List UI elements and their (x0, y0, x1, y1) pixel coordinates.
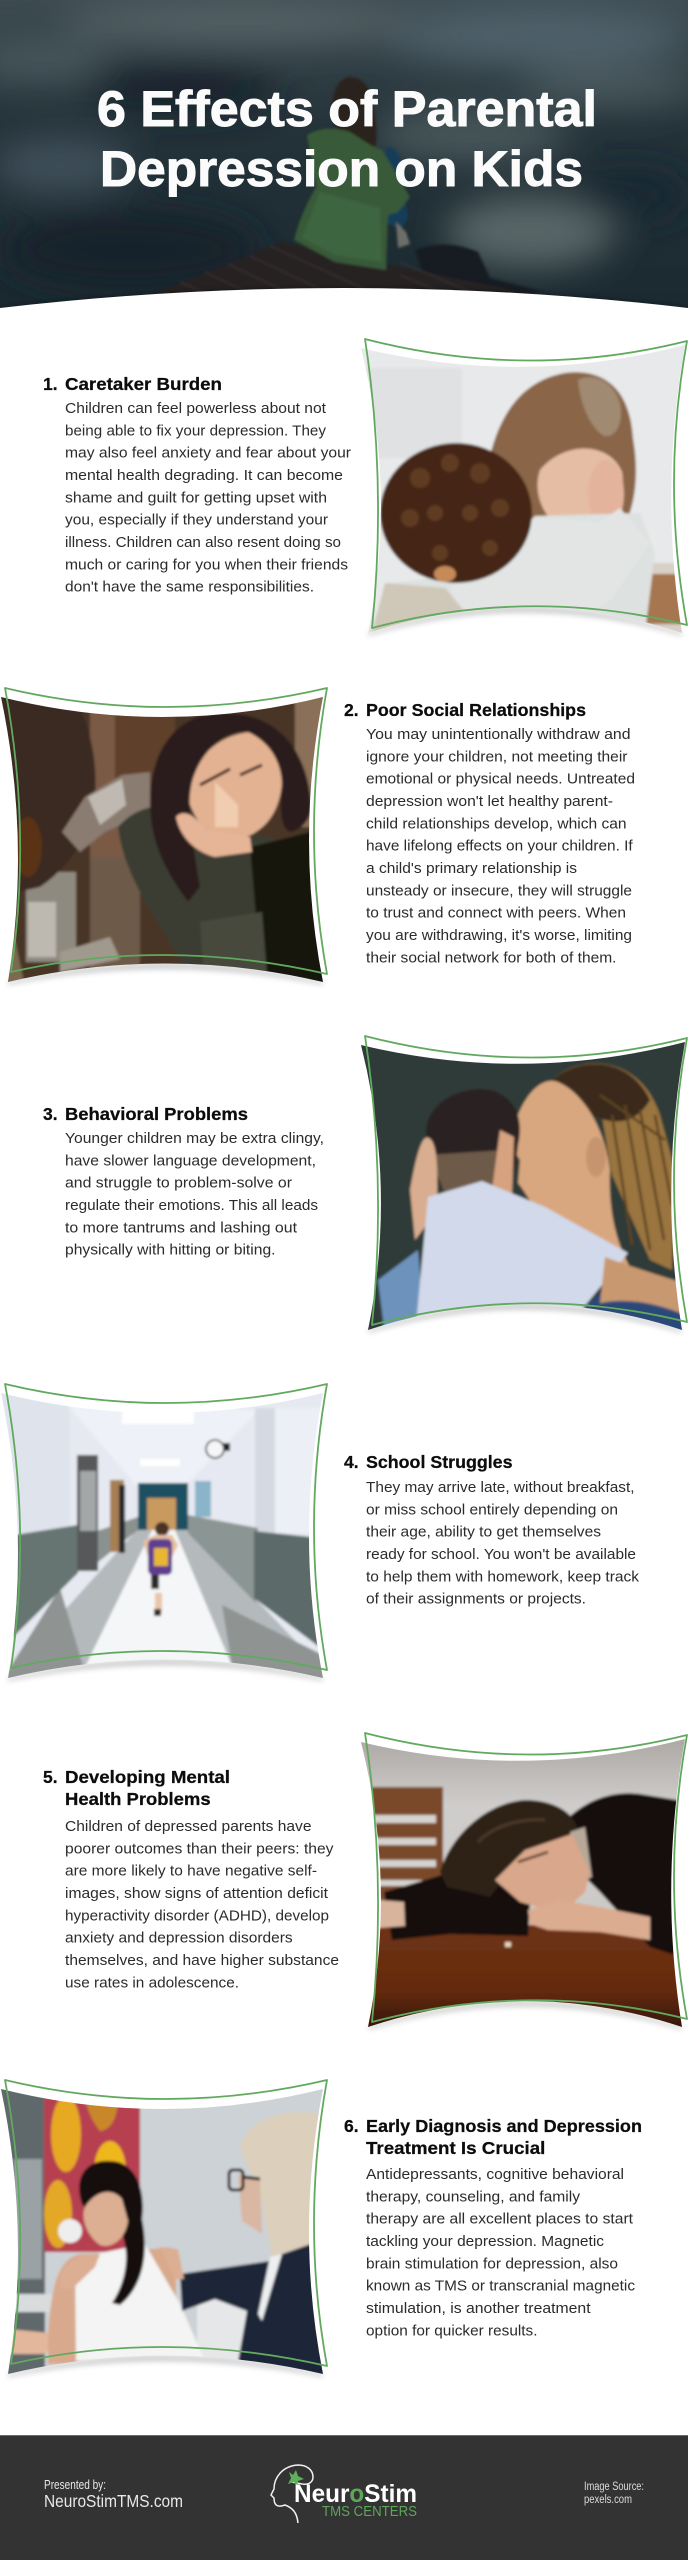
body text 6: brain stimulation for depression, also (366, 2255, 618, 2272)
image source (584, 2481, 644, 2506)
heading 2: 2. (344, 700, 359, 720)
body text 2: a child's primary relationship is (366, 860, 577, 877)
logo: NeuroStim TMS Centers (271, 2465, 417, 2523)
body text 4: They may arrive late, without breakfast, (366, 1479, 634, 1496)
body text 1: may also feel anxiety and fear about your (65, 445, 351, 462)
body text 5: themselves, and have higher substance (65, 1952, 339, 1969)
photo 3: mother kissing son (350, 1035, 688, 1335)
panel: 1 caretaker burden (43, 338, 688, 638)
hair (332, 77, 377, 150)
body text 2: unsteady or insecure, they will struggle (366, 882, 632, 899)
heading 2: Poor Social Relationships (366, 700, 586, 720)
body text 4: to help them with homework, keep track (366, 1568, 640, 1585)
footer bar (0, 2435, 688, 2560)
heading 4: 4. (344, 1452, 359, 1472)
heading 1: 1. (43, 374, 58, 394)
sweater (568, 1792, 676, 1956)
heading 5: Developing Mental (65, 1767, 230, 1787)
body text 2: have lifelong effects on your children. If (366, 838, 634, 855)
green frame 4 (5, 1384, 327, 1670)
sweater (117, 806, 279, 964)
panel: 2 poor social relationships (0, 687, 635, 997)
body text 2: ignore your children, not meeting their (366, 748, 628, 765)
body text 3: physically with hitting or biting. (65, 1242, 276, 1259)
face (186, 732, 283, 840)
body text 3: to more tantrums and lashing out (65, 1219, 298, 1236)
tagline: TMS CENTERS (322, 2503, 417, 2520)
green frame 2 (5, 688, 327, 974)
body text 1: Children can feel powerless about not (65, 400, 327, 417)
child (155, 1593, 162, 1613)
table and hand (10, 2328, 50, 2356)
body text 1: illness. Children can also resent doing so (65, 534, 341, 551)
body text 5: anxiety and depression disorders (65, 1930, 293, 1947)
body text 2: you are withdrawing, it's worse, limiting (366, 927, 632, 944)
hand (176, 813, 252, 857)
body text 3: Younger children may be extra clingy, (65, 1130, 324, 1147)
title: Depression on Kids (100, 141, 583, 197)
green frame 3 (365, 1036, 687, 1325)
panel: 4 school struggles (0, 1383, 640, 1693)
image source: Image Source: (584, 2481, 644, 2493)
hair (150, 713, 311, 902)
heading 6: Treatment Is Crucial (366, 2138, 545, 2158)
eyes (200, 765, 262, 785)
heading 6: Early Diagnosis and Depression (366, 2116, 642, 2136)
heading 4: School Struggles (366, 1452, 513, 1472)
dock (156, 242, 525, 294)
body text 3: and struggle to problem-solve or (65, 1175, 292, 1192)
presented by: NeuroStimTMS.com (44, 2491, 183, 2511)
photo 1: mother and curly haired child (350, 338, 688, 638)
collar (570, 1827, 592, 1882)
body text 2: child relationships develop, which can (366, 815, 627, 832)
body text 5 (65, 1818, 339, 1991)
body text 1 (65, 400, 351, 596)
floor (65, 1528, 296, 1664)
body text 4 (366, 1479, 640, 1608)
body text 6: option for quicker results. (366, 2322, 538, 2339)
body text 4: their age, ability to get themselves (366, 1524, 601, 1541)
body text 1: you, especially if they understand your (65, 512, 328, 529)
heading 5: 5. (43, 1767, 58, 1787)
heading 3: Behavioral Problems (65, 1104, 248, 1124)
wainscot (13, 1524, 80, 1638)
body text 5: poorer outcomes than their peers: they (65, 1840, 334, 1857)
body text 2: You may unintentionally withdraw and (366, 726, 630, 743)
presented by: Presented by: (44, 2478, 106, 2492)
photo 2: woman resting chin on hand (0, 687, 335, 997)
boy head (426, 1089, 520, 1190)
body text 3: have slower language development, (65, 1152, 316, 1169)
arm and hand (528, 1900, 650, 1940)
body text 4: ready for school. You won't be available (366, 1546, 636, 1563)
body text 1: shame and guilt for getting upset with (65, 489, 327, 506)
mother skin (515, 1078, 630, 1266)
hair (440, 1800, 578, 1897)
header white curve (0, 288, 688, 345)
green frame 5 (365, 1733, 687, 2022)
green frame 6 (5, 2080, 327, 2366)
photo 6: therapist comforting a woman (0, 2079, 335, 2389)
panel: 6 early diagnosis (0, 2079, 642, 2389)
panel: 5 developing mental health problems (43, 1732, 688, 2035)
body text 2 (366, 726, 635, 966)
blazer (180, 2239, 330, 2379)
heading 5: Health Problems (65, 1789, 211, 1809)
header photo: woman on a dock over dark water (0, 0, 688, 320)
body text 5: are more likely to have negative self- (65, 1863, 317, 1880)
body text 4: of their assignments or projects. (366, 1591, 586, 1608)
body text 3 (65, 1130, 324, 1259)
body text 6: stimulation, is another treatment (366, 2300, 591, 2317)
doctor (240, 2112, 322, 2304)
body text 4: or miss school entirely depending on (366, 1501, 618, 1518)
heading 6 (344, 2116, 642, 2158)
body text 6 (366, 2166, 636, 2339)
body text 2: depression won't let healthy parent- (366, 793, 613, 810)
clock (206, 1440, 224, 1458)
body text 6: tackling your depression. Magnetic (366, 2233, 605, 2250)
icon: head outline with star (271, 2465, 313, 2523)
body text 5: hyperactivity disorder (ADHD), develop (65, 1907, 329, 1924)
shirt (416, 1181, 628, 1325)
photo 5: person slumped on a wooden table (350, 1732, 688, 2035)
body text 5: use rates in adolescence. (65, 1974, 239, 1991)
heading 6: 6. (344, 2116, 359, 2136)
header curve shadow (0, 290, 688, 311)
body text 6: known as TMS or transcranial magnetic (366, 2278, 636, 2295)
photo 4: child running down school hallway (0, 1383, 345, 1693)
body text 1: don't have the same responsibilities. (65, 579, 314, 596)
body text 5: images, show signs of attention deficit (65, 1885, 329, 1902)
heading 3: 3. (43, 1104, 58, 1124)
panel: 3 behavioral problems (43, 1035, 688, 1335)
title (97, 81, 597, 197)
body text 6: therapy, counseling, and family (366, 2188, 581, 2205)
braids (552, 1063, 675, 1270)
presented by (44, 2478, 183, 2511)
doors (77, 1455, 98, 1571)
image source: pexels.com (584, 2494, 632, 2506)
body text 2: their social network for both of them. (366, 949, 616, 966)
wordmark: NeuroStim (294, 2480, 417, 2508)
body text 2: to trust and connect with peers. When (366, 905, 626, 922)
body text 1: much or caring for you when their friends (65, 556, 348, 573)
jeans (386, 147, 408, 230)
woman (48, 2247, 176, 2364)
face (495, 1834, 590, 1909)
body text 1: mental health degrading. It can become (65, 467, 343, 484)
body text 1: being able to fix your depression. They (65, 422, 326, 439)
shoe (396, 222, 410, 248)
body text 5: Children of depressed parents have (65, 1818, 312, 1835)
body text 6: Antidepressants, cognitive behavioral (366, 2166, 624, 2183)
hand (410, 1138, 438, 1240)
body text 2: emotional or physical needs. Untreated (366, 771, 635, 788)
body text 6: therapy are all excellent places to start (366, 2211, 634, 2228)
green frame 1 (365, 339, 687, 628)
title: 6 Effects of Parental (97, 81, 597, 137)
heading 1: Caretaker Burden (65, 374, 222, 394)
jacket (294, 129, 410, 270)
rock (415, 244, 545, 296)
heading 5 (43, 1767, 230, 1809)
body text 3: regulate their emotions. This all leads (65, 1197, 318, 1214)
